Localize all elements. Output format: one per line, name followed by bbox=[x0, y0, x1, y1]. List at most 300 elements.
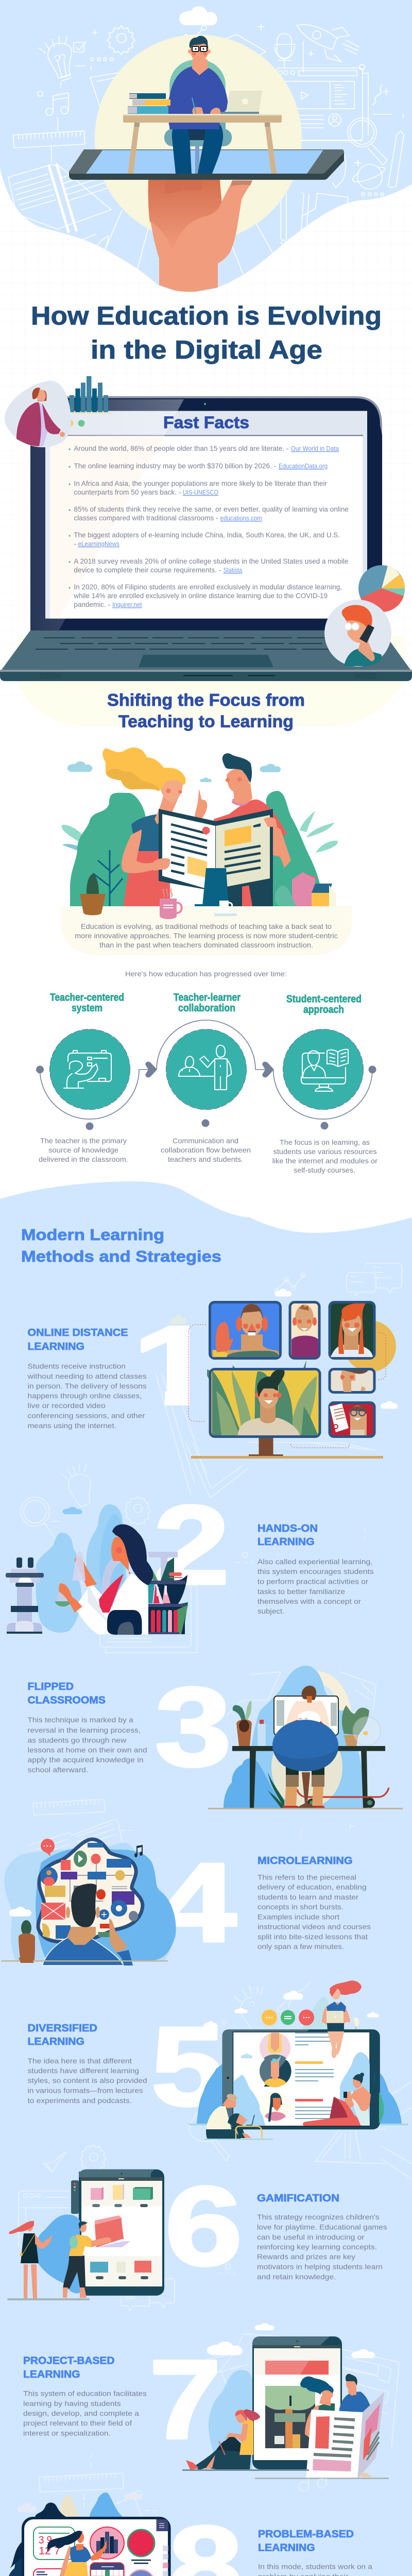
woman on tablet bbox=[322, 1980, 362, 2058]
illustration: smart board bbox=[0, 2492, 171, 2576]
heading bbox=[258, 1523, 318, 1548]
description: tasks to better familiarize bbox=[258, 1587, 345, 1596]
hero cream circle bbox=[95, 35, 302, 242]
red circle bbox=[128, 2530, 154, 2564]
step 1: delivered in the classroom. bbox=[39, 1155, 128, 1163]
description: and retain knowledge. bbox=[257, 2273, 336, 2281]
icon: teacher at board bbox=[64, 1050, 111, 1088]
step 1: Teacher-centered bbox=[50, 992, 124, 1004]
heading: modern learning bbox=[21, 1226, 221, 1265]
cactus pot bbox=[19, 1920, 35, 1963]
text: progression intro: Here's how education has progressed over time: bbox=[125, 970, 287, 978]
woman figure bbox=[9, 2221, 53, 2299]
man on phone bbox=[324, 600, 391, 667]
fact list: Around the world, 86% of people older than 15 years old are literate. - bbox=[74, 444, 289, 452]
description: conferencing sessions, and other bbox=[28, 1412, 145, 1420]
frame C: red-haired woman bbox=[330, 1302, 374, 1358]
description: The idea here is that different bbox=[28, 2057, 132, 2065]
plant bbox=[93, 850, 123, 906]
icon: student at computer bbox=[301, 1049, 348, 1091]
description: school afterward. bbox=[28, 1766, 88, 1774]
hands on newspaper bbox=[153, 817, 277, 871]
pie chart bbox=[358, 565, 405, 612]
step 3: The focus is on learning, as bbox=[280, 1138, 370, 1146]
outer bushes bbox=[197, 2061, 402, 2124]
description: styles, so content is also provided bbox=[28, 2076, 147, 2084]
chat bubbles bbox=[262, 2009, 314, 2026]
description bbox=[257, 2213, 387, 2281]
cream oval bbox=[271, 1726, 342, 1808]
description: lessons at home on their own and bbox=[28, 1746, 147, 1754]
step 2: teachers and students. bbox=[168, 1155, 243, 1163]
heading: FLIPPED bbox=[28, 1681, 74, 1692]
landscape image bbox=[265, 2386, 315, 2448]
fact list: In Africa and Asia, the younger populations are more likely to be literate than their bbox=[74, 479, 327, 487]
fact list: pandemic. - bbox=[74, 600, 110, 608]
woman with bar chart bbox=[5, 376, 112, 447]
description: students to learn and master bbox=[258, 1893, 358, 1901]
phone screen bbox=[86, 150, 323, 174]
camera bbox=[204, 403, 206, 405]
legs bbox=[172, 123, 223, 174]
ghost doodles bbox=[19, 2145, 234, 2311]
panel: method 8 problem-based learning bbox=[0, 2473, 373, 2576]
fact list: UIS-UNESCO bbox=[183, 488, 218, 496]
number 6: 6 bbox=[165, 2164, 243, 2289]
green floor plant bbox=[268, 1772, 285, 1808]
frame D: woman and plants bbox=[210, 1369, 320, 1436]
description: reinforcing key learning concepts. bbox=[257, 2243, 377, 2251]
title bbox=[31, 301, 382, 364]
bird bbox=[353, 2018, 359, 2029]
panel: fast facts laptop bbox=[0, 396, 412, 726]
intro paragraph: Education is evolving, as traditional methods of teaching take a back seat to bbox=[81, 922, 332, 930]
heading: LEARNING bbox=[28, 1341, 84, 1352]
fact list: Inquirer.net bbox=[112, 601, 142, 608]
illustration: video call grid bbox=[188, 1289, 398, 1459]
heading: fast facts: Fast Facts bbox=[163, 413, 249, 432]
fact list: educations.com bbox=[220, 514, 262, 522]
description: concepts in short bursts. bbox=[258, 1903, 344, 1911]
woman bbox=[102, 748, 186, 906]
header rule bbox=[50, 435, 363, 436]
heading: MICROLEARNING bbox=[258, 1855, 353, 1867]
person back on ball bbox=[272, 1720, 338, 1771]
floor bbox=[1, 1960, 168, 1962]
connector arcs bbox=[40, 1020, 372, 1119]
hero line-art doodles bbox=[8, 24, 404, 278]
bushes and clouds bbox=[0, 2492, 142, 2576]
description: only span a few minutes. bbox=[258, 1942, 344, 1951]
description: Examples include short bbox=[258, 1913, 339, 1921]
step 3 bbox=[272, 994, 377, 1174]
panel: progression steps bbox=[36, 992, 377, 1174]
skateboard bbox=[297, 1788, 389, 1808]
bottle bbox=[258, 1720, 266, 1746]
newspaper bbox=[159, 809, 273, 891]
heading: LEARNING bbox=[258, 2543, 315, 2554]
phone front edge bbox=[69, 152, 344, 180]
woman figure bbox=[300, 2377, 335, 2439]
heading: CLASSROOMS bbox=[28, 1695, 106, 1706]
music note bbox=[134, 1845, 143, 1857]
illustration: game tablet bbox=[7, 2170, 164, 2300]
bushes bbox=[70, 791, 323, 906]
monitor stand bbox=[249, 1438, 283, 1456]
description: design, develop, and complete a bbox=[23, 2409, 139, 2417]
description bbox=[28, 1716, 147, 1774]
chart circle bbox=[90, 2527, 124, 2559]
panel: method 4 microlearning bbox=[1, 1799, 371, 1965]
cream ring bbox=[314, 1671, 352, 1726]
chair bbox=[164, 60, 232, 174]
illustration: concept map bbox=[1, 1839, 176, 1965]
heading: LEARNING bbox=[28, 2036, 84, 2047]
description: apply the acquired knowledge in bbox=[28, 1756, 144, 1764]
heading bbox=[258, 2529, 354, 2554]
neck bbox=[192, 59, 208, 75]
dashed connectors bbox=[188, 1325, 386, 1448]
screen bbox=[274, 1696, 338, 1735]
green flask bbox=[55, 1583, 70, 1607]
description: reversal in the learning process, bbox=[28, 1726, 141, 1734]
ghost doodles bbox=[227, 1672, 376, 1716]
step 2: Teacher-learner bbox=[174, 992, 241, 1004]
left plant bbox=[233, 1700, 252, 1746]
woman figure bbox=[16, 387, 65, 446]
description: This system of education facilitates bbox=[23, 2389, 147, 2398]
description: Rewards and prizes are key bbox=[257, 2252, 355, 2261]
intro paragraph bbox=[75, 922, 338, 949]
icon: teacher and learner bbox=[179, 1045, 231, 1090]
man at desk bbox=[123, 36, 282, 174]
description: this system encourages students bbox=[258, 1567, 374, 1575]
blue bushes bbox=[224, 1666, 364, 1808]
frame B: boy bbox=[290, 1302, 319, 1358]
blue circle bbox=[128, 2570, 154, 2576]
white cup bbox=[214, 901, 237, 916]
fact list: - bbox=[74, 539, 76, 548]
ghost doodles bbox=[21, 1464, 365, 1653]
hero blue wave background bbox=[0, 0, 412, 292]
description: In this mode, students work on a bbox=[258, 2563, 372, 2571]
description: in person. The delivery of lessons bbox=[28, 1382, 147, 1390]
panel: method 6 gamification bbox=[7, 2145, 387, 2311]
heading: LEARNING bbox=[23, 2369, 80, 2380]
cloud bits bbox=[203, 1991, 379, 2028]
status dots bbox=[67, 420, 84, 427]
cloud bbox=[170, 1315, 186, 1324]
description: This strategy recognizes children's bbox=[257, 2213, 380, 2221]
description: students have different learning bbox=[28, 2066, 139, 2075]
fact list: Statista bbox=[224, 566, 243, 574]
floors bbox=[189, 2124, 408, 2125]
heading: LEARNING bbox=[258, 1536, 315, 1548]
shelf bbox=[191, 1456, 383, 1459]
title: How Education is Evolving bbox=[31, 301, 382, 330]
floor bbox=[7, 2298, 90, 2300]
description: without needing to attend classes bbox=[27, 1372, 147, 1380]
books bbox=[128, 93, 170, 114]
fact list: eLearningNews bbox=[78, 540, 119, 548]
frame F: man with document bbox=[330, 1402, 374, 1436]
cream half circle behind laptop bbox=[17, 636, 405, 726]
man figure bbox=[63, 2222, 111, 2298]
description: Students receive instruction bbox=[28, 1362, 126, 1370]
step 2: collaboration bbox=[178, 1003, 235, 1014]
step 2 bbox=[161, 992, 251, 1163]
panel: method 5 diversified learning bbox=[28, 1980, 412, 2179]
heading: PROBLEM-BASED bbox=[258, 2529, 354, 2540]
frame A: waving man bbox=[210, 1302, 280, 1358]
head bbox=[188, 36, 211, 62]
blue section background bbox=[0, 1181, 412, 2576]
description: live or recorded video bbox=[28, 1401, 106, 1410]
head and hair bbox=[111, 1524, 153, 1585]
hero cloud bbox=[179, 6, 217, 25]
tablet body bbox=[222, 2029, 380, 2129]
intro paragraph: more innovative approaches. The learning process is now more student-centric bbox=[75, 931, 338, 940]
description: split into bite-sized lessons that bbox=[258, 1933, 368, 1941]
number 3: 3 bbox=[154, 1665, 232, 1790]
laptop bbox=[217, 91, 262, 114]
ghost doodles bbox=[91, 2334, 399, 2468]
leaves bbox=[62, 811, 338, 855]
description: interest or specialization. bbox=[23, 2429, 111, 2437]
fact list bbox=[68, 444, 349, 608]
desk bbox=[232, 1746, 385, 1808]
number 2: 2 bbox=[153, 1483, 230, 1608]
ghost doodles bbox=[28, 1799, 355, 1855]
woman figure bbox=[47, 2531, 107, 2576]
step 3: Student-centered bbox=[286, 994, 362, 1005]
floor bbox=[208, 1808, 403, 1809]
cloud bbox=[9, 1907, 31, 1917]
leaves behind frame D bbox=[207, 1360, 306, 1383]
ghost doodles bbox=[156, 1263, 402, 1498]
ghost doodles bbox=[39, 2473, 327, 2576]
man figure bbox=[339, 2374, 372, 2413]
heading: shifting the focus: Teaching to Learning bbox=[118, 712, 294, 731]
heading: shifting the focus: Shifting the Focus from bbox=[107, 690, 305, 709]
arrowheads bbox=[145, 1062, 274, 1077]
heading bbox=[28, 1681, 106, 1706]
step 2: Communication and bbox=[173, 1137, 238, 1145]
number 5: 5 bbox=[151, 2004, 225, 2129]
description: motivators in helping students learn bbox=[257, 2263, 383, 2271]
cloud bbox=[62, 1507, 82, 1514]
heading: HANDS-ON bbox=[258, 1523, 318, 1534]
keyboard deck bbox=[0, 631, 412, 672]
hands and pen bbox=[192, 98, 220, 114]
heading: PROJECT-BASED bbox=[23, 2355, 114, 2367]
blue bush bbox=[36, 2214, 80, 2293]
description: project relevant to their field of bbox=[23, 2419, 132, 2427]
description bbox=[23, 2389, 147, 2437]
stat card: 3 9 bbox=[39, 2534, 52, 2546]
heading: modern learning: Methods and Strategies bbox=[21, 1247, 221, 1265]
illustration: student at desk bbox=[208, 1666, 403, 1809]
fact list: A 2018 survey reveals 20% of online college students in the United States used a mobile bbox=[74, 557, 349, 565]
lab coat bbox=[75, 1574, 148, 1634]
hero illustration: hand holding phone bbox=[69, 149, 344, 294]
man figure bbox=[342, 605, 382, 666]
description: Also called experiential learning, bbox=[258, 1557, 373, 1566]
description: instructional videos and courses bbox=[258, 1923, 371, 1931]
pills bbox=[33, 2569, 68, 2576]
description: This refers to the piecemeal bbox=[258, 1873, 356, 1882]
bar chart bbox=[70, 376, 112, 414]
microscope bbox=[6, 1557, 44, 1634]
houses bbox=[275, 872, 336, 906]
fact list: while 14% are enrolled exclusively in online distance learning due to the COVID-19 bbox=[73, 591, 328, 600]
bush bbox=[209, 2370, 252, 2469]
sweater bbox=[166, 66, 228, 129]
description: can be useful in introducing or bbox=[257, 2233, 365, 2241]
heading: DIVERSIFIED bbox=[28, 2023, 97, 2034]
bushes bbox=[4, 1843, 174, 1960]
step 1: The teacher is the primary bbox=[40, 1137, 127, 1145]
step 1: source of knowledge bbox=[48, 1146, 118, 1154]
speech bubble bbox=[41, 1839, 55, 1856]
laptop bezel bbox=[30, 398, 382, 631]
number 4: 4 bbox=[158, 1840, 237, 1965]
description bbox=[27, 1362, 147, 1430]
illustration: scientist bbox=[6, 1504, 188, 1635]
bush above tablet bbox=[302, 1996, 330, 2029]
seated man bbox=[206, 2094, 262, 2140]
description bbox=[258, 1557, 374, 1615]
avatars bbox=[260, 2032, 291, 2122]
clouds bbox=[274, 1289, 398, 1409]
number 7: 7 bbox=[149, 2337, 221, 2463]
panel: method 7 project-based learning bbox=[23, 2323, 399, 2479]
fact list: In 2020, 80% of Filipino students are enrolled exclusively in modular distance learning, bbox=[74, 583, 342, 591]
title: in the Digital Age bbox=[91, 335, 322, 364]
heading bbox=[28, 2023, 97, 2047]
panel: method 2 hands-on learning bbox=[6, 1464, 374, 1653]
man figure bbox=[42, 1884, 133, 1965]
step 2: collaboration flow between bbox=[161, 1146, 251, 1154]
description bbox=[258, 2563, 373, 2576]
right plant and fishbowl bbox=[342, 1705, 381, 1746]
screen glare bbox=[30, 399, 184, 630]
description: happens through online classes, bbox=[28, 1392, 142, 1400]
fact list: device to complete their course requirements. - bbox=[74, 566, 221, 574]
fact list: The online learning industry may be worth $370 billion by 2026. - bbox=[74, 462, 277, 470]
legs bbox=[283, 1767, 325, 1808]
clouds bbox=[67, 761, 281, 782]
step 1 bbox=[39, 992, 130, 1163]
arms bbox=[59, 1556, 97, 1613]
description: in various formats—from lectures bbox=[28, 2087, 143, 2095]
lab equipment bbox=[101, 1552, 178, 1614]
fact list: counterparts from 50 years back. - bbox=[74, 488, 181, 496]
description: delivery of education, enabling bbox=[258, 1883, 367, 1891]
heading bbox=[28, 1327, 128, 1352]
heading: shifting the focus bbox=[107, 690, 305, 731]
bushes bbox=[36, 1504, 126, 1633]
description: means using the internet. bbox=[28, 1421, 116, 1430]
desk bbox=[123, 114, 282, 174]
newspaper bbox=[306, 2392, 384, 2479]
fact list: EducationData.org bbox=[279, 462, 328, 470]
heading: ONLINE DISTANCE bbox=[28, 1327, 128, 1338]
heading bbox=[23, 2355, 114, 2380]
board bbox=[22, 2517, 171, 2576]
fact list: Our World in Data bbox=[291, 445, 339, 452]
description: learning by having students bbox=[23, 2399, 121, 2408]
connector dots bbox=[36, 1065, 376, 1130]
description: themselves with a concept or bbox=[258, 1597, 361, 1605]
illustration: phone and team bbox=[182, 2323, 389, 2479]
raised finger bbox=[195, 789, 207, 819]
beaker bbox=[72, 1552, 85, 1581]
description bbox=[258, 1873, 371, 1951]
game boxes bbox=[90, 2183, 153, 2279]
description: subject. bbox=[258, 1607, 284, 1615]
laptop base bbox=[0, 670, 412, 681]
laptop lid bbox=[30, 396, 382, 631]
inner bushes bbox=[233, 2052, 370, 2126]
cactus pot bbox=[80, 874, 106, 915]
frame E: woman waving bbox=[330, 1369, 374, 1392]
clouds bbox=[207, 2323, 375, 2358]
description bbox=[28, 2057, 147, 2105]
description: to experiments and podcasts. bbox=[28, 2096, 132, 2105]
description: This technique is marked by a bbox=[28, 1716, 133, 1724]
intro paragraph: than in the past when teachers dominated classroom instruction. bbox=[99, 941, 313, 949]
banner bbox=[265, 2361, 329, 2375]
stat card: 12 7 bbox=[39, 2545, 60, 2557]
step 3: approach bbox=[303, 1004, 344, 1015]
tablet bbox=[79, 2170, 164, 2296]
description: as students go through new bbox=[28, 1736, 127, 1744]
stat card bbox=[33, 2527, 75, 2560]
pink mug bbox=[160, 889, 182, 919]
illustration: tablet and students bbox=[189, 1980, 408, 2140]
fact list: The biggest adopters of e-learning include China, India, South Korea, the UK, and U.S. bbox=[74, 531, 340, 539]
screen bbox=[45, 411, 367, 619]
step 3: students use various resources bbox=[273, 1147, 377, 1156]
keyboard keys bbox=[36, 637, 335, 650]
phone body bbox=[69, 149, 344, 180]
seated woman bbox=[303, 2073, 371, 2126]
floors bbox=[182, 2469, 389, 2479]
hand bbox=[148, 180, 252, 294]
panel: method 1 online distance learning bbox=[27, 1263, 402, 1498]
map blocks bbox=[40, 1843, 138, 1939]
step 3: like the internet and modules or bbox=[272, 1157, 377, 1165]
seated woman bbox=[186, 2410, 260, 2470]
description: to perform practical activities or bbox=[258, 1578, 368, 1586]
cloud in tablet bbox=[241, 2054, 253, 2058]
stand bbox=[195, 868, 229, 906]
calendar bbox=[90, 2563, 124, 2576]
fact list: classes compared with traditional classrooms - bbox=[74, 514, 218, 522]
concept blob bbox=[38, 1839, 143, 1942]
description: love for playtime. Educational games bbox=[257, 2223, 387, 2231]
side panel bbox=[71, 2180, 79, 2214]
phone bbox=[252, 2336, 342, 2469]
heading: GAMIFICATION bbox=[257, 2193, 339, 2204]
cream table bbox=[61, 906, 352, 955]
fact list: 85% of students think they receive the same, or even better, quality of learning via online bbox=[74, 505, 349, 513]
touchpad bbox=[139, 655, 273, 667]
number 1: 1 bbox=[132, 1303, 219, 1428]
ghost doodles bbox=[190, 1981, 412, 2179]
info lines bbox=[295, 2032, 334, 2119]
